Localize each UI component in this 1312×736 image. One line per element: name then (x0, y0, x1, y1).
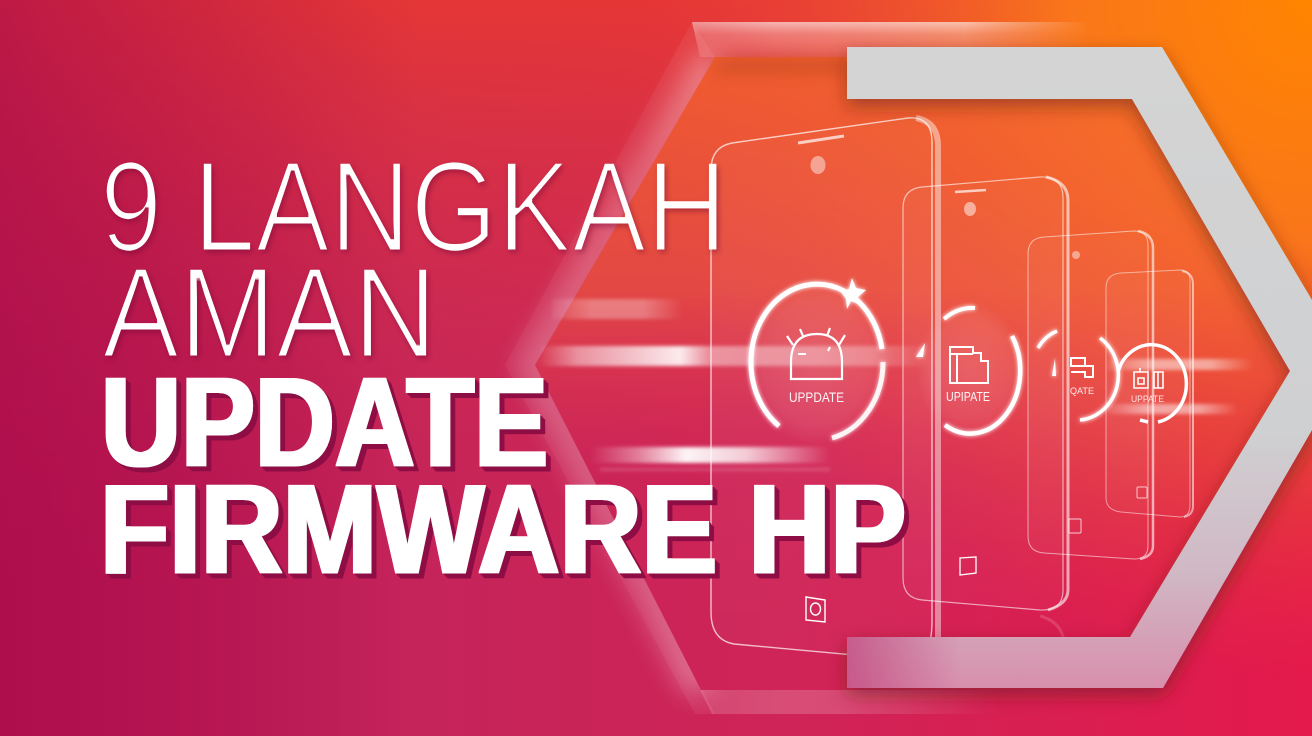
icon: android dome (787, 328, 845, 379)
icon: phone 3 camera (1072, 251, 1080, 259)
label: update 1: UPPDATE (789, 389, 844, 405)
grey hexagon frame (847, 47, 1312, 688)
ring 1 with star (751, 278, 883, 438)
title line: update: UPDATE (101, 351, 548, 493)
rings and update icons (745, 278, 1186, 446)
inner hexagon top shadow (712, 60, 850, 72)
phone 4 (1106, 270, 1193, 517)
label: update 4: UPPATE (1131, 394, 1164, 404)
icon: phone 3 home button (1069, 519, 1081, 533)
icon: small locks (1134, 368, 1163, 388)
label: update 3: QATE (1070, 386, 1094, 396)
icon: folder steps (950, 347, 988, 383)
hexagon interior tint (535, 57, 1290, 690)
icon: phone 2 camera (964, 202, 976, 216)
phone 2 (903, 177, 1068, 642)
phone 1 (711, 118, 938, 660)
ring 2 (916, 308, 1020, 434)
title line: 9 langkah: 9 LANGKAH (100, 135, 727, 279)
title line: aman: AMAN (102, 241, 437, 385)
phone 2 speaker (955, 190, 986, 192)
frosted hexagon band (505, 22, 1090, 714)
title (100, 135, 906, 600)
label: update 2: UPIPATE (946, 389, 990, 404)
icon: stacked boxes (1071, 358, 1093, 377)
light streaks (538, 299, 1253, 471)
ring 4 (1118, 345, 1186, 422)
phone 2 floor reflection (1040, 616, 1064, 642)
ring glow discs (745, 278, 1024, 446)
title line: firmware hp: FIRMWARE HP (100, 458, 906, 600)
phone 1 speaker (798, 136, 844, 143)
icon: phone 4 home button (1137, 487, 1147, 498)
icon: phone 1 camera (810, 156, 826, 174)
phone 3 (1028, 231, 1153, 559)
icon: phone 1 home button (806, 597, 825, 622)
icon: phone 2 home button (960, 557, 976, 575)
ring 3 (1038, 331, 1118, 420)
